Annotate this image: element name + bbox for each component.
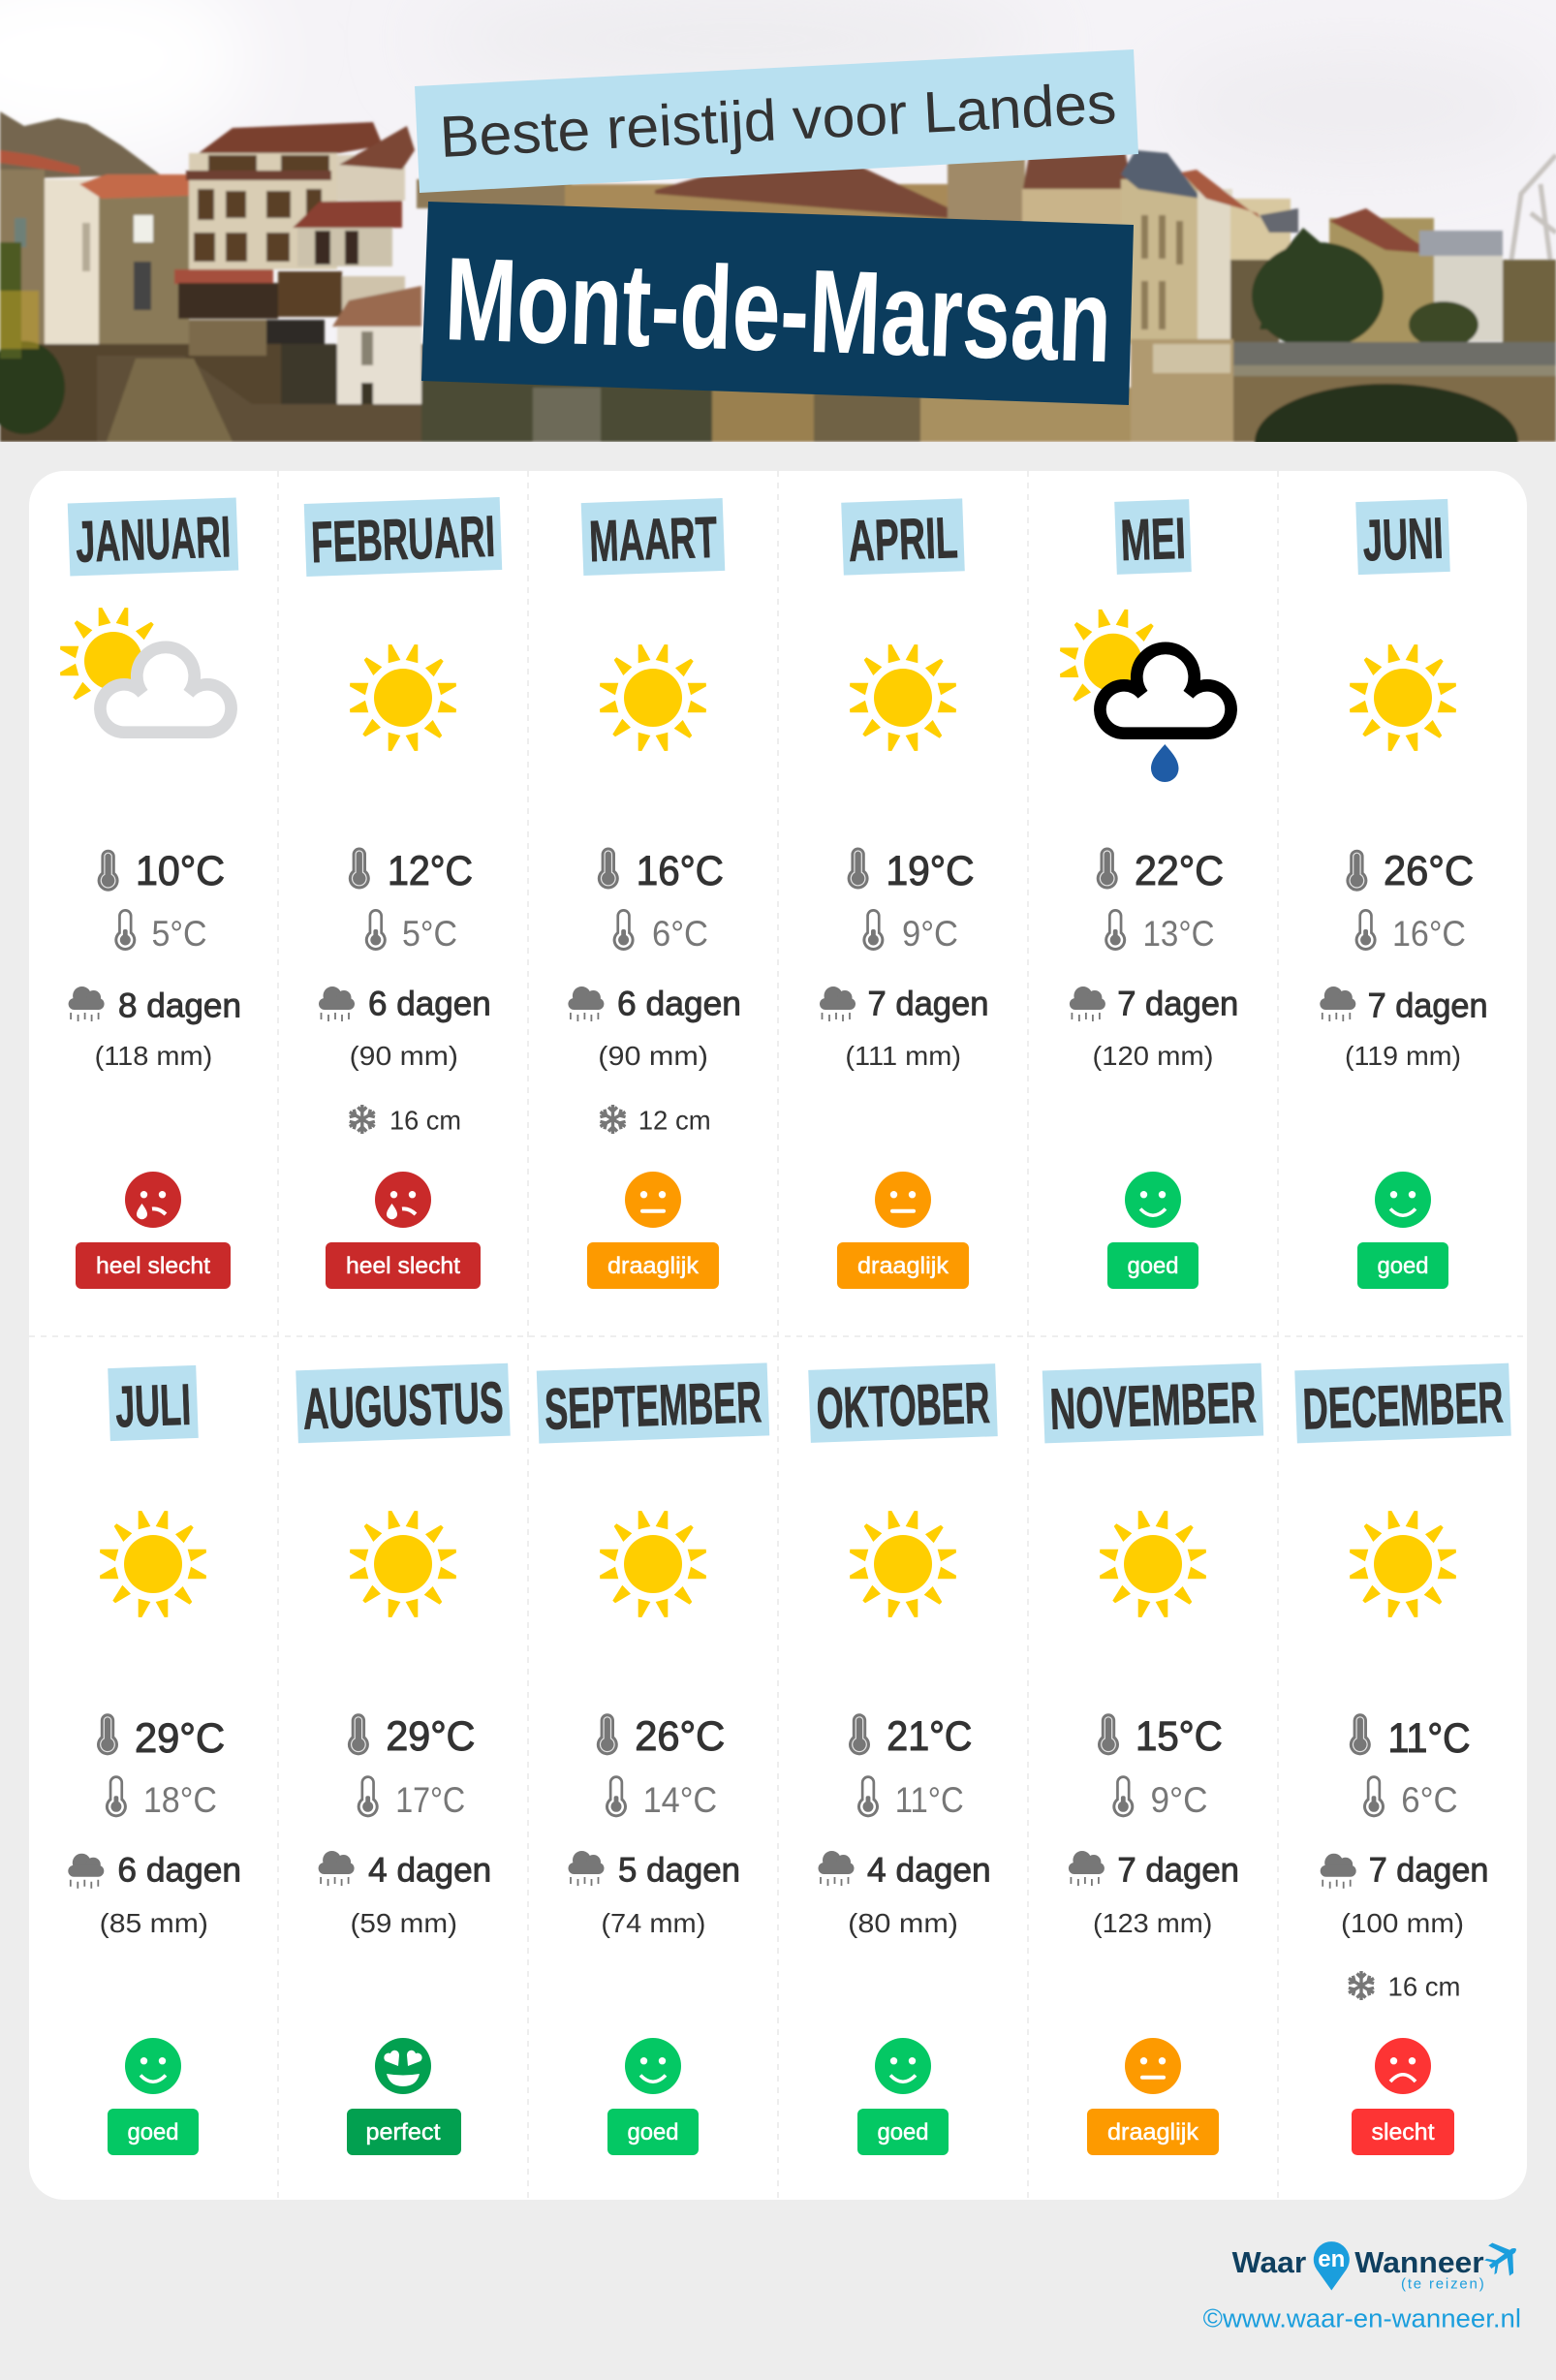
panel: januari [60, 497, 241, 1289]
rainfall: 7 dagen [1369, 1852, 1488, 1890]
hero photo: riverside town [0, 0, 1556, 500]
logo: Waar en Wanneer: Wanneer [1354, 2245, 1484, 2279]
temperatures [1098, 1713, 1223, 1820]
icon: sun [1350, 1511, 1456, 1617]
panel: april [820, 498, 988, 1289]
rating: goed: goed [128, 2119, 178, 2145]
title banner: Mont-de-Marsan [443, 233, 1113, 387]
rainfall: 6 dagen [617, 985, 741, 1023]
rainfall [1320, 986, 1488, 1071]
icon: sun [850, 1511, 956, 1617]
temperatures: 11°C [895, 1780, 964, 1820]
rainfall [568, 985, 741, 1071]
temperatures: 5°C [402, 914, 457, 954]
icon: sun behind black cloud with rain drop [1060, 610, 1231, 782]
rainfall: (123 mm) [1093, 1908, 1212, 1938]
title banner [421, 202, 1134, 405]
rainfall [1069, 1851, 1239, 1938]
panel: oktober [808, 1363, 998, 2155]
rating: goed: goed [878, 2119, 928, 2145]
month label: februari [304, 497, 502, 577]
temperatures [98, 848, 225, 954]
month label: juni [1355, 499, 1450, 575]
rainfall: 8 dagen [118, 986, 241, 1025]
temperatures: 5°C [151, 914, 207, 954]
subtitle banner: Beste reistijd voor Landes [438, 71, 1118, 170]
month label: oktober: OKTOBER [815, 1370, 991, 1441]
month label: september: SEPTEMBER [544, 1369, 762, 1442]
rainfall [1070, 985, 1238, 1071]
logo: Waar en Wanneer: (te reizen) [1401, 2276, 1484, 2293]
month label: mei: MEI [1119, 506, 1187, 573]
temperatures: 19°C [886, 848, 975, 894]
panel: februari [304, 497, 502, 1289]
bridge [1233, 342, 1556, 365]
temperatures: 16°C [1392, 914, 1466, 954]
rainfall [818, 1851, 991, 1938]
rating: heel slecht [326, 1172, 481, 1289]
temperatures: 15°C [1136, 1713, 1223, 1760]
temperatures: 6°C [1401, 1780, 1458, 1820]
panel: juli [68, 1365, 241, 2155]
rainfall: (74 mm) [601, 1908, 705, 1938]
temperatures: 14°C [643, 1780, 717, 1820]
month label: mei [1114, 499, 1192, 575]
temperatures: 29°C [386, 1713, 475, 1760]
month label: januari: JANUARI [75, 504, 232, 575]
right of banner [1022, 189, 1134, 228]
panel: augustus [296, 1363, 511, 2155]
rainfall [69, 986, 241, 1071]
rating: draaglijk [587, 1172, 719, 1289]
website credit: ©www.waar-en-wanneer.nl [1203, 2304, 1521, 2333]
rainfall: 6 dagen [368, 985, 491, 1023]
month label: november [1043, 1363, 1263, 1443]
rainfall [1321, 1852, 1488, 1938]
temperatures: 26°C [1384, 848, 1474, 894]
temperatures: 11°C [1387, 1715, 1471, 1762]
temperatures [1097, 847, 1224, 954]
temperatures: 29°C [135, 1715, 225, 1762]
lower slope [0, 344, 426, 442]
snowfall [1347, 1971, 1461, 2001]
rating: goed [857, 2038, 949, 2155]
logo: Waar en Wanneer: en [1318, 2246, 1345, 2272]
rainfall [568, 1851, 740, 1938]
temperatures: 26°C [635, 1713, 725, 1760]
month label: april: APRIL [847, 505, 959, 574]
trees [1252, 242, 1384, 349]
rainfall: (111 mm) [845, 1041, 961, 1071]
month label: augustus: AUGUSTUS [301, 1369, 505, 1442]
temperatures: 12°C [388, 848, 473, 894]
temperatures [349, 847, 473, 954]
temperatures [97, 1713, 225, 1820]
month label: september [537, 1362, 769, 1444]
temperatures: 18°C [143, 1780, 217, 1820]
month label: oktober [808, 1363, 998, 1443]
temperatures: 6°C [652, 914, 708, 954]
icon: sun [850, 644, 956, 751]
month label: augustus [296, 1363, 511, 1443]
rainfall: (118 mm) [95, 1041, 212, 1071]
temperatures [348, 1713, 475, 1820]
panel: september [537, 1362, 769, 2155]
rainfall: (90 mm) [598, 1041, 708, 1071]
temperatures [597, 1713, 725, 1820]
rainfall [820, 985, 988, 1071]
rainfall: 5 dagen [618, 1852, 740, 1890]
panel: maart [568, 498, 741, 1289]
rainfall: (119 mm) [1345, 1041, 1461, 1071]
temperatures: 9°C [1151, 1780, 1207, 1820]
temperatures: 21°C [887, 1713, 972, 1760]
logo: Waar en Wanneer [1232, 2234, 1527, 2293]
rating: goed [108, 2038, 199, 2155]
rainfall: 7 dagen [1117, 985, 1238, 1023]
month label: juli: JULI [114, 1372, 192, 1439]
rainfall: (80 mm) [848, 1908, 958, 1938]
icon: sun [350, 644, 456, 751]
panel: climate calendar card [29, 471, 1527, 2200]
snowfall [598, 1105, 711, 1136]
rainfall [68, 1852, 241, 1938]
temperatures: 9°C [902, 914, 958, 954]
rating: perfect: perfect [366, 2119, 441, 2145]
rating: goed: goed [1128, 1253, 1178, 1279]
rating: goed: goed [628, 2119, 678, 2145]
month label: november: NOVEMBER [1048, 1369, 1258, 1442]
temperatures: 16°C [637, 848, 724, 894]
temperatures: 10°C [136, 848, 225, 894]
snowfall: 12 cm [638, 1106, 711, 1136]
rating: heel slecht: heel slecht [96, 1253, 210, 1279]
logo: Waar en Wanneer: Waar [1232, 2245, 1306, 2279]
temperatures: 17°C [395, 1780, 465, 1820]
rainfall [319, 985, 491, 1071]
rainfall: (90 mm) [350, 1041, 458, 1071]
temperatures [1350, 1713, 1471, 1820]
balconies [174, 269, 273, 284]
temperatures [1346, 848, 1474, 954]
rainfall: (100 mm) [1341, 1908, 1464, 1938]
rating: heel slecht: heel slecht [346, 1253, 460, 1279]
icon: map pin [1314, 2241, 1350, 2291]
rainfall: 4 dagen [368, 1852, 491, 1890]
rating: draaglijk: draaglijk [607, 1253, 700, 1279]
snowfall [348, 1105, 461, 1136]
rainfall: 6 dagen [117, 1852, 241, 1890]
rating: perfect [347, 2038, 461, 2155]
snowfall: 16 cm [389, 1106, 461, 1136]
rating: draaglijk [837, 1172, 969, 1289]
panel: mei [1060, 499, 1238, 1289]
rainfall [319, 1851, 491, 1938]
panel: juni [1320, 499, 1488, 1289]
panel: november [1043, 1363, 1263, 2155]
centre buildings [417, 179, 572, 208]
rating: heel slecht [76, 1172, 231, 1289]
rainfall: (59 mm) [351, 1908, 457, 1938]
rating: draaglijk: draaglijk [1107, 2119, 1199, 2145]
rating: slecht [1352, 2038, 1454, 2155]
month label: februari: FEBRUARI [310, 504, 496, 575]
icon: sun [1350, 644, 1456, 751]
icon: sun [350, 1511, 456, 1617]
far left roofs [0, 111, 160, 179]
icon: sun behind grey cloud [60, 608, 232, 733]
temperatures: 22°C [1135, 848, 1224, 894]
temperatures [849, 1713, 972, 1820]
icon: sun [600, 1511, 706, 1617]
rainfall: 4 dagen [867, 1852, 991, 1890]
bottom centre [421, 378, 712, 442]
rating: goed [1357, 1172, 1448, 1289]
icon: sun [100, 1511, 206, 1617]
rating: draaglijk [1087, 2038, 1219, 2155]
cream house [199, 122, 383, 153]
panel: december [1294, 1363, 1511, 2155]
rating: goed [1107, 1172, 1198, 1289]
rainfall: (120 mm) [1093, 1041, 1213, 1071]
rainfall: 7 dagen [1117, 1852, 1239, 1890]
month label: april [841, 498, 965, 576]
rating: goed: goed [1378, 1253, 1428, 1279]
snowfall: 16 cm [1387, 1971, 1461, 2001]
icon: sun [1100, 1511, 1206, 1617]
temperatures [598, 847, 724, 954]
subtitle banner [415, 49, 1138, 193]
temperatures: 13°C [1143, 914, 1215, 954]
rainfall: (85 mm) [100, 1908, 208, 1938]
rating: goed [607, 2038, 699, 2155]
icon: airplane [1478, 2234, 1527, 2282]
icon: sun [600, 644, 706, 751]
month label: maart [581, 498, 725, 576]
rating: draaglijk: draaglijk [857, 1253, 949, 1279]
month label: januari [68, 497, 238, 577]
month label: juni: JUNI [1361, 506, 1445, 573]
rainfall: 7 dagen [1368, 986, 1488, 1025]
month label: juli [108, 1365, 199, 1441]
rating: slecht: slecht [1372, 2119, 1435, 2145]
month label: maart: MAART [588, 505, 718, 574]
temperatures [848, 847, 975, 954]
rainfall: 7 dagen [868, 985, 988, 1023]
